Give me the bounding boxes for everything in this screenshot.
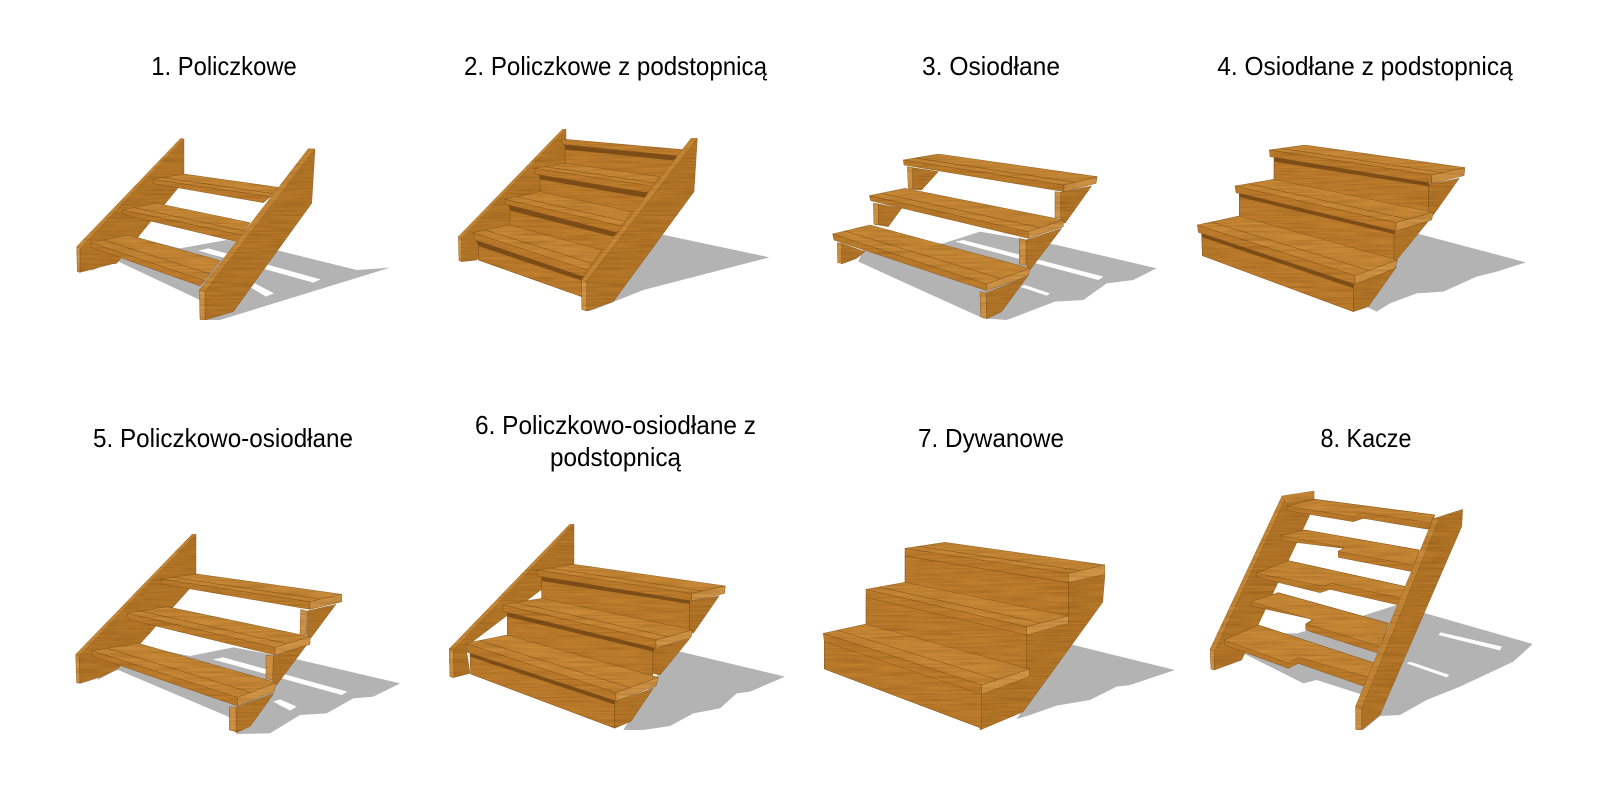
heading: 6. Policzkowo-osiodłane z podstopnicą <box>475 410 756 472</box>
right stringer <box>1356 509 1463 730</box>
riser body <box>1202 158 1428 312</box>
shadow <box>1217 605 1533 730</box>
shadow <box>623 650 785 730</box>
tread 1 <box>537 564 725 604</box>
panel: 7. Dywanowe <box>823 423 1175 730</box>
shadow <box>1017 643 1175 719</box>
shadow <box>1363 232 1526 312</box>
stair model <box>458 129 697 311</box>
shadow <box>858 232 1157 320</box>
illustration: stringer and cut stringer stairs with risers <box>449 524 785 730</box>
tread 2 <box>505 192 632 237</box>
tread 3 <box>92 643 277 706</box>
panel: 6. Policzkowo-osiodłane z podstopnicą <box>449 410 785 730</box>
shadow <box>97 647 400 734</box>
shadow <box>90 240 390 320</box>
tread 3 <box>823 624 1029 694</box>
left stringer <box>449 524 574 678</box>
riser body <box>478 145 687 297</box>
left stringer <box>1210 491 1314 670</box>
tread 2 <box>1235 179 1433 234</box>
tread 1 <box>1269 145 1465 186</box>
illustration: cut stringer stairs with risers <box>1197 145 1526 312</box>
illustration: stringer stairs with risers <box>458 129 769 312</box>
panel: 8. Kacze <box>1210 423 1533 730</box>
tread 2 <box>123 203 250 242</box>
riser body <box>824 556 1068 728</box>
heading: 6. Policzkowo-osiodłane z podstopnicą: podstopnicą <box>550 442 681 472</box>
notched tread 1 <box>1287 499 1435 529</box>
illustration: stringer stairs <box>77 138 390 320</box>
heading: 5. Policzkowo-osiodłane: 5. Policzkowo-osiodłane <box>93 423 353 453</box>
heading: 2. Policzkowe z podstopnicą: 2. Policzkowe z podstopnicą <box>464 51 768 81</box>
heading: 3. Osiodłane: 3. Osiodłane <box>922 51 1060 81</box>
panel: 2. Policzkowe z podstopnicą <box>458 51 769 312</box>
stair model <box>1210 491 1463 730</box>
stair model <box>77 138 315 320</box>
illustration: cut stringer stairs <box>833 154 1157 320</box>
upper cut stringer <box>300 604 336 638</box>
left stringer <box>76 534 196 683</box>
left stringer <box>458 129 566 262</box>
riser body <box>470 577 689 728</box>
notched tread 2 <box>1281 530 1419 572</box>
heading: 1. Policzkowe: 1. Policzkowe <box>151 51 297 81</box>
tread 3 <box>833 225 1030 291</box>
tread 2 <box>127 607 310 655</box>
notched tread 4 <box>1251 593 1388 653</box>
tread 2 <box>869 188 1063 238</box>
right stringer <box>582 138 697 311</box>
back stringer pieces <box>907 167 1092 223</box>
tread 1 <box>153 174 278 203</box>
panel: 3. Osiodłane <box>833 51 1157 320</box>
panel: 1. Policzkowe <box>77 51 390 320</box>
stair model <box>1197 145 1465 312</box>
stair model <box>823 542 1105 730</box>
cut stringer side <box>614 596 719 728</box>
shadow <box>587 233 769 312</box>
tread 1 <box>903 154 1097 192</box>
tread 1 <box>905 542 1105 583</box>
illustration: duck-step stairs <box>1210 491 1533 730</box>
closed side <box>980 574 1105 730</box>
heading: 4. Osiodłane z podstopnicą: 4. Osiodłane z podstopnicą <box>1217 51 1513 81</box>
heading: 6. Policzkowo-osiodłane z podstopnicą: 6. Policzkowo-osiodłane z <box>475 410 756 440</box>
notched tread 3 <box>1256 561 1406 605</box>
tread 3 <box>91 235 220 286</box>
heading: 8. Kacze: 8. Kacze <box>1320 423 1412 453</box>
panel: 4. Osiodłane z podstopnicą <box>1197 51 1526 312</box>
heading: 7. Dywanowe: 7. Dywanowe <box>918 423 1064 453</box>
lower cut stringer <box>229 693 274 733</box>
illustration: carpet stairs <box>823 542 1175 730</box>
tread 2 <box>866 582 1068 635</box>
tread 1 <box>534 163 660 198</box>
tread 3 <box>473 225 602 281</box>
notched tread 5 <box>1224 625 1373 686</box>
tread 3 <box>466 635 658 705</box>
stringer side <box>1353 178 1459 312</box>
panel: 5. Policzkowo-osiodłane <box>76 423 400 734</box>
illustration: stringer and cut stringer stairs <box>76 534 400 734</box>
right stringer <box>199 149 315 320</box>
lower stringer pieces <box>837 243 1027 319</box>
tread 3 <box>1197 216 1397 288</box>
stair model <box>76 534 342 733</box>
stair model <box>449 524 725 728</box>
stair model <box>833 154 1097 319</box>
left stringer <box>77 138 184 272</box>
tread 2 <box>503 598 693 652</box>
middle cut stringer <box>266 645 307 685</box>
tread 1 <box>161 574 342 609</box>
top nosing <box>562 139 687 161</box>
middle stringer pieces <box>873 203 1062 270</box>
